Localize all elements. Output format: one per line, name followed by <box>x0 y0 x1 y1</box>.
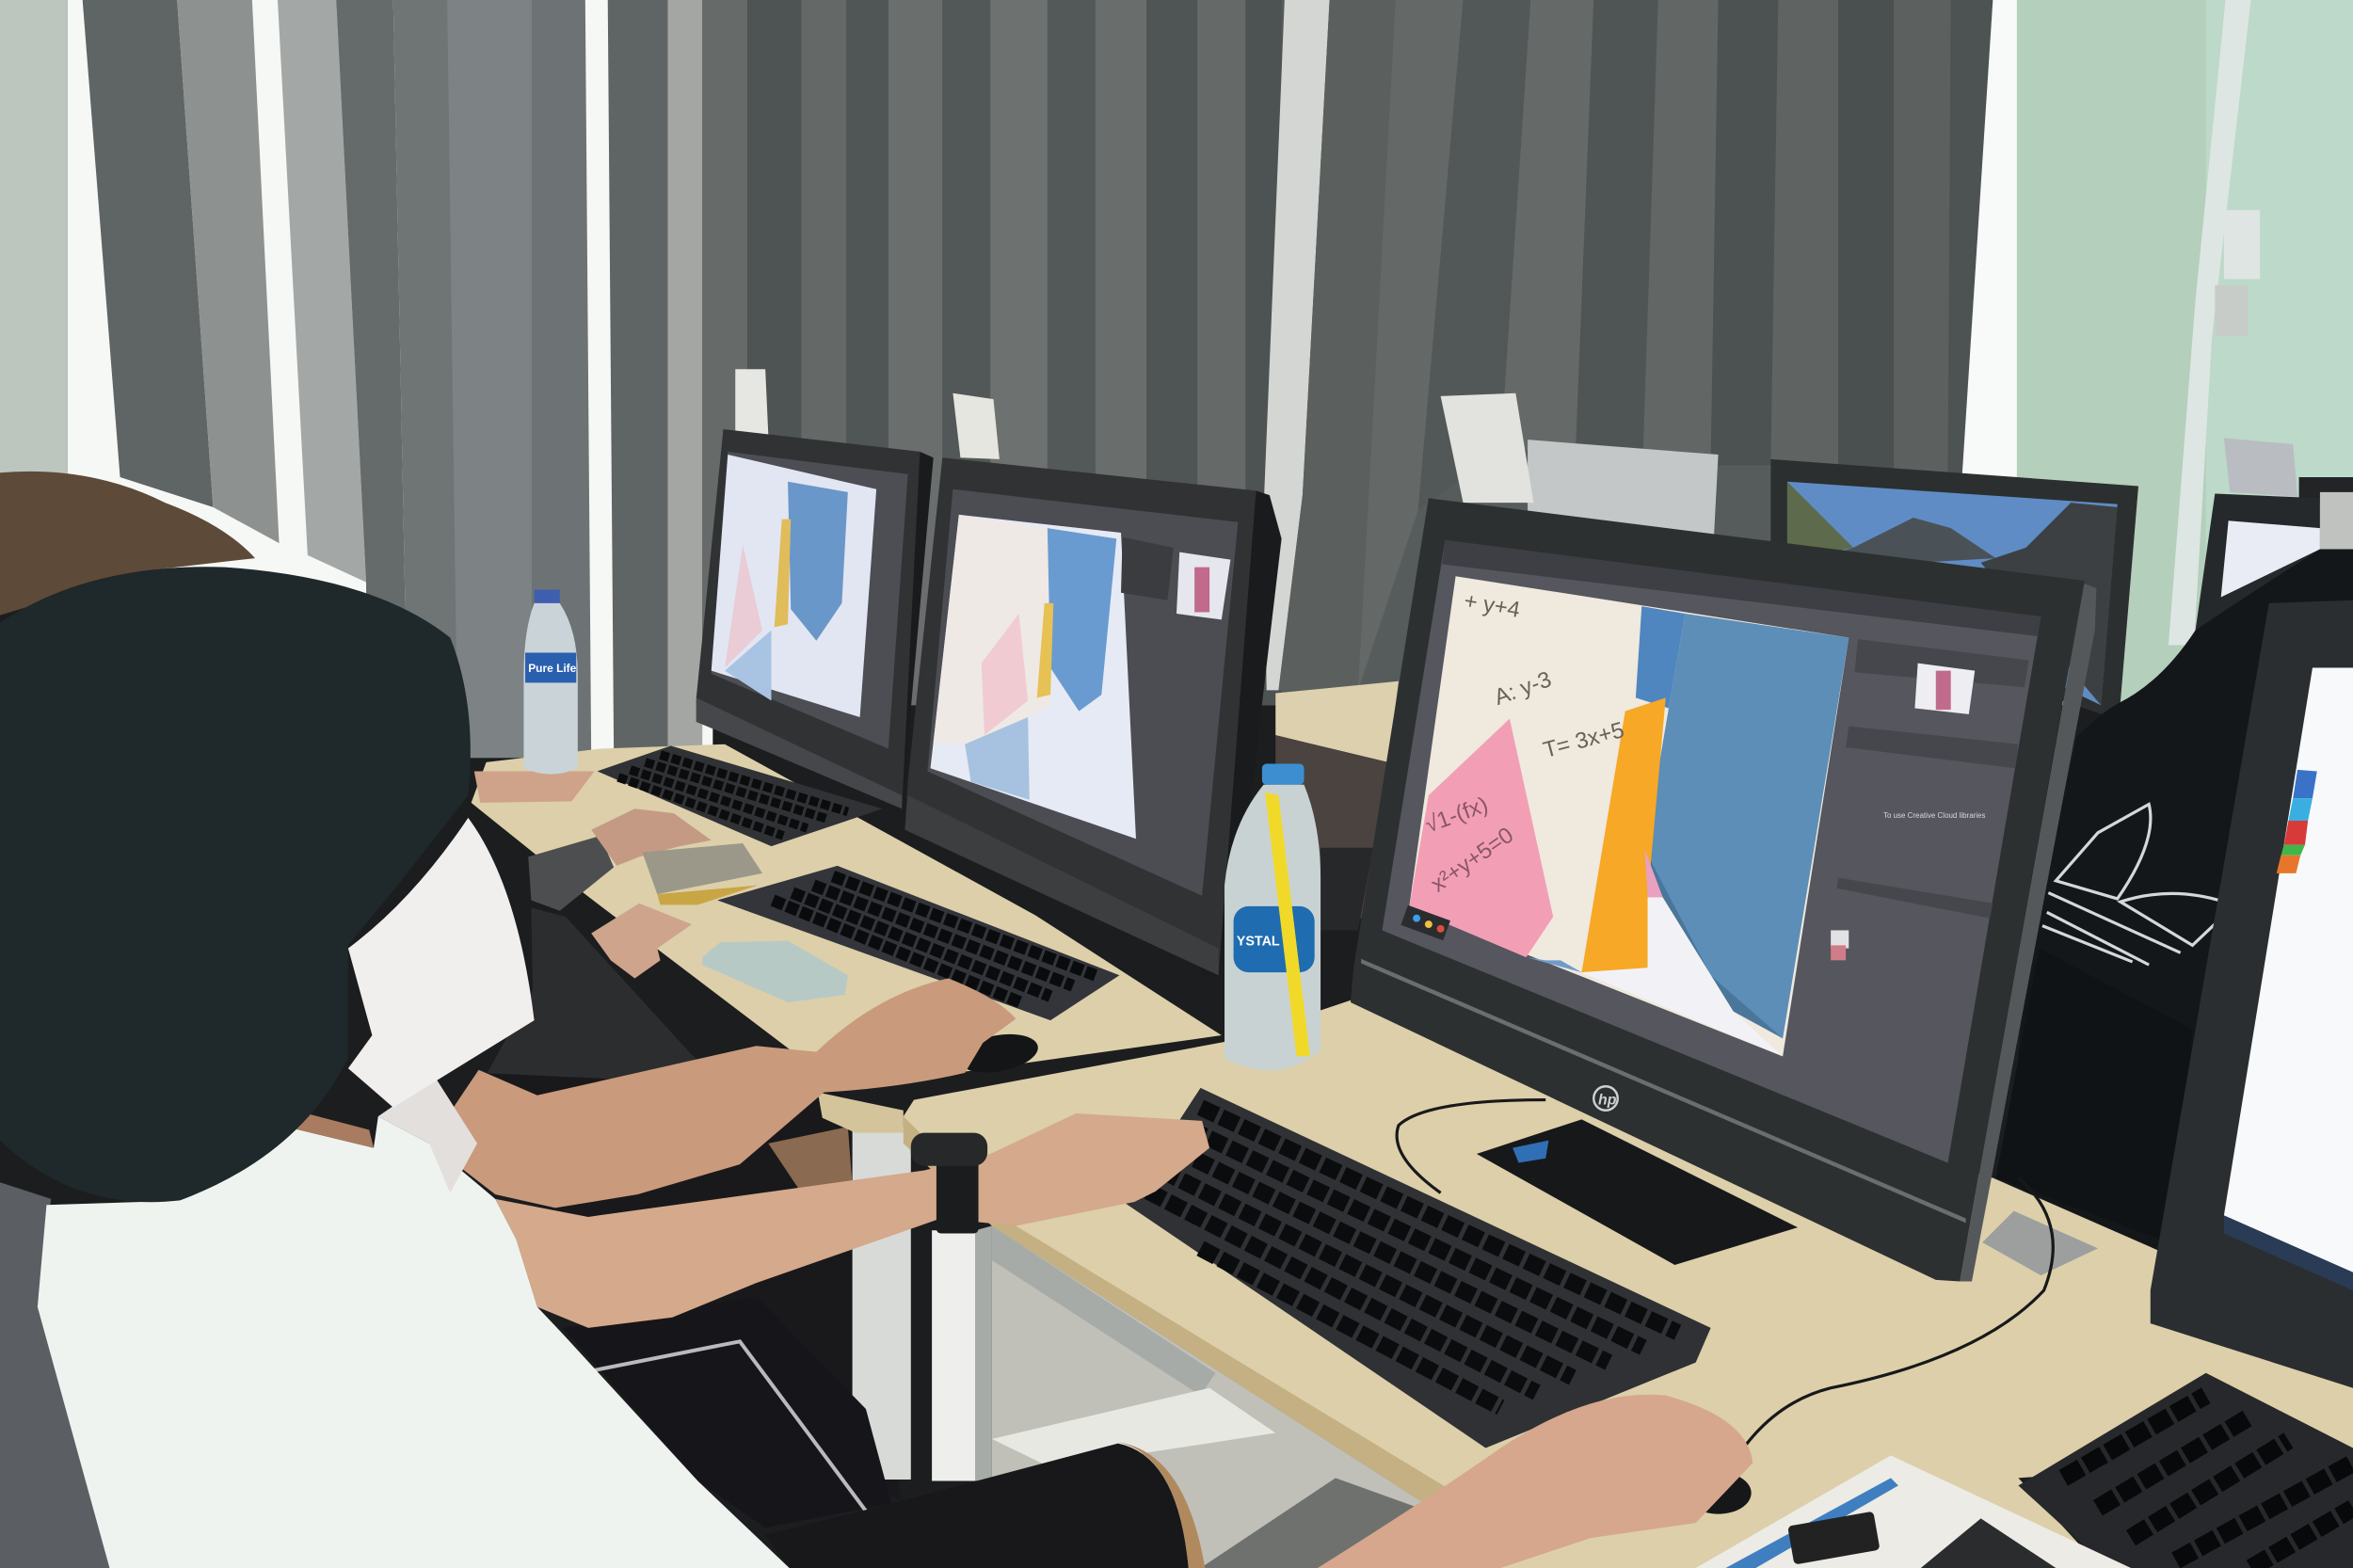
mouse under hand <box>955 1029 1041 1078</box>
monitor 2 <box>904 393 1282 975</box>
upper arm and hand on mouse <box>429 978 1016 1208</box>
water bottle 2 <box>1225 763 1321 1070</box>
keyboard 1 <box>598 745 883 846</box>
monitor 1 <box>696 369 934 808</box>
water bottle 1 <box>523 590 578 775</box>
photoshop canvas <box>1409 576 1849 1056</box>
bright window at right <box>1961 0 2018 510</box>
mint green pillar and wall <box>2017 0 2353 705</box>
photoshop panels <box>1831 639 2029 960</box>
neck skin <box>243 1106 374 1148</box>
back student hand resting on desk <box>591 904 692 978</box>
handwritten math: x²+y+5=0 <box>1426 823 1518 897</box>
front student lower arm and hand <box>495 1113 1209 1328</box>
back monitor with mountain wallpaper <box>1770 459 2138 720</box>
front student hair <box>0 567 471 1202</box>
main monitor stand <box>1397 1100 1798 1265</box>
bottom right keyboard <box>2018 1373 2353 1568</box>
front student white shirt <box>38 1116 790 1568</box>
far back monitor <box>1441 393 1719 540</box>
water bottle 1: Pure Life <box>528 662 577 675</box>
right student in black <box>1996 549 2353 1351</box>
back student leg <box>768 1127 853 1189</box>
front right monitor <box>2151 600 2353 1388</box>
mouse cable <box>1734 1177 2053 1463</box>
dark clothes under desk <box>480 1073 901 1500</box>
papers on desk <box>1696 1455 2131 1568</box>
trefoil logo on shirt <box>2042 805 2224 965</box>
monitor lower bezel line <box>1361 959 1966 1223</box>
wristwatch <box>911 1133 987 1233</box>
back student brown hair <box>0 472 255 616</box>
handwritten math: + y+4 <box>1462 588 1522 623</box>
shorts <box>765 1442 1205 1568</box>
front student chair back <box>0 1182 109 1568</box>
far right monitor and paper <box>2196 439 2353 631</box>
handwritten math: A: y-3 <box>1491 666 1555 711</box>
handwritten math: √1-(fx) <box>1422 792 1492 838</box>
keyboard 2 <box>717 866 1119 1020</box>
photoshop menu bar <box>1442 540 2041 636</box>
office chair <box>563 1296 891 1528</box>
back student arm and hands <box>474 771 712 911</box>
floor and desk frame <box>853 1127 1449 1568</box>
taskbar icons <box>1401 905 1450 940</box>
photoshop panels: To use Creative Cloud libraries <box>1883 811 1985 820</box>
handwritten math <box>1422 588 1627 897</box>
vertical blinds: left section <box>83 0 705 758</box>
main keyboard <box>1126 1088 1711 1448</box>
handwritten math: T= 3x+5 <box>1541 717 1627 763</box>
main monitor <box>1351 498 2096 1281</box>
shelf under window <box>1275 681 1399 930</box>
face mask <box>348 818 535 1108</box>
hp logo: hp <box>1598 1092 1617 1108</box>
black office chair at right <box>1996 949 2192 1245</box>
main desk <box>818 998 2353 1568</box>
water bottle 2: YSTAL <box>1237 934 1280 949</box>
shirt collar shadow <box>378 1078 477 1192</box>
bottom hand on mouse <box>1318 1395 1753 1568</box>
phone <box>702 941 848 1002</box>
social share buttons <box>2277 770 2317 873</box>
vertical blinds: right section <box>702 0 1993 705</box>
wallet <box>642 843 762 904</box>
back student dark sweater <box>483 908 720 1080</box>
back desk <box>472 744 1222 1089</box>
hp logo <box>1593 1086 1618 1111</box>
